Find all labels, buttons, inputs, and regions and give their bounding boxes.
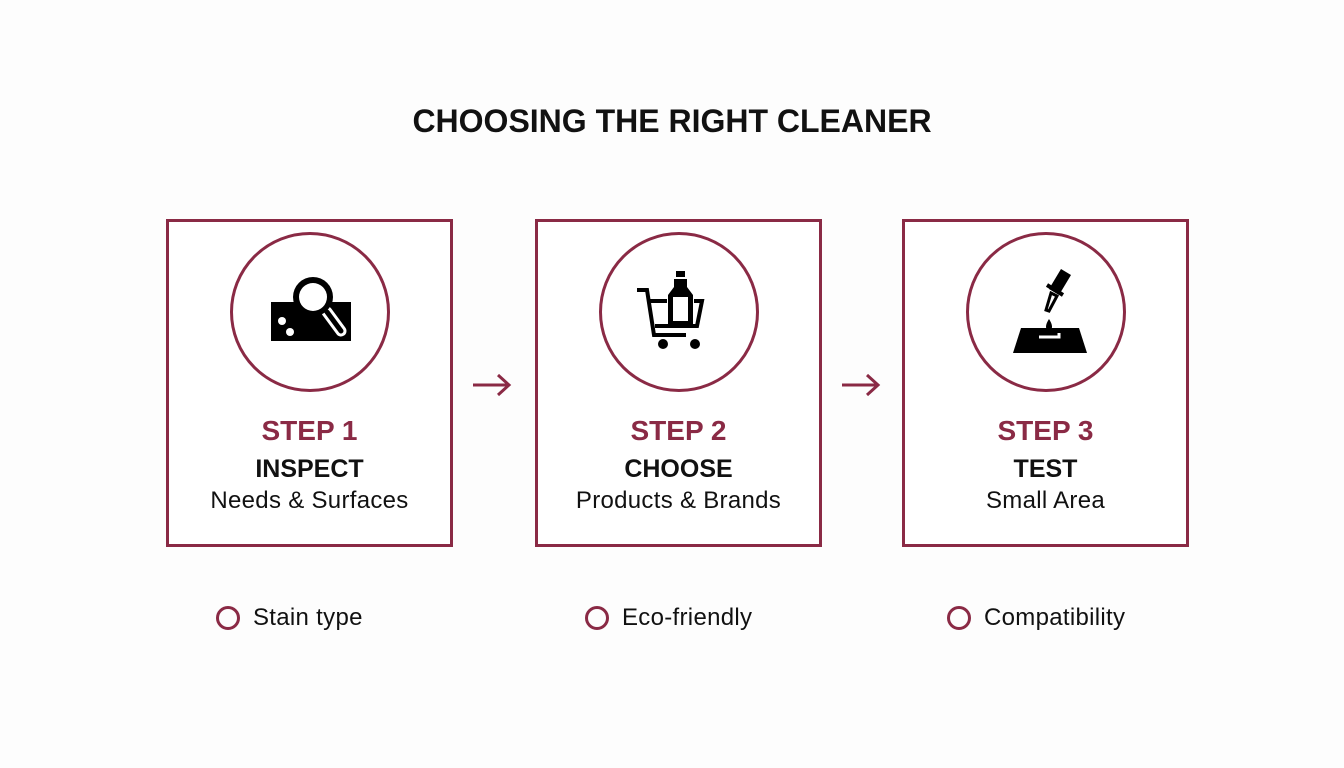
- step label: STEP 2: [630, 415, 726, 446]
- icon: dropper on surface: [966, 232, 1126, 392]
- step name: CHOOSE: [624, 455, 733, 483]
- panel: step 1: [166, 219, 453, 547]
- arrow 2: [842, 374, 880, 396]
- arrow 1: [473, 374, 512, 396]
- checklist item 2: Eco-friendly: [622, 604, 752, 631]
- step name: TEST: [1014, 455, 1077, 483]
- icon: cart with bottle: [599, 232, 759, 392]
- icon: magnifier over surface: [230, 232, 390, 392]
- title: CHOOSING THE RIGHT CLEANER: [412, 103, 932, 139]
- step label: STEP 1: [262, 415, 357, 446]
- checklist item 1: Stain type: [253, 604, 363, 631]
- checklist item 3: Compatibility: [984, 604, 1125, 631]
- panel: step 2: [535, 219, 822, 547]
- step description: Products & Brands: [576, 487, 781, 514]
- step name: INSPECT: [255, 455, 364, 483]
- step description: Needs & Surfaces: [210, 487, 409, 514]
- panel: step 3: [902, 219, 1189, 547]
- step description: Small Area: [986, 487, 1105, 514]
- step label: STEP 3: [998, 415, 1093, 446]
